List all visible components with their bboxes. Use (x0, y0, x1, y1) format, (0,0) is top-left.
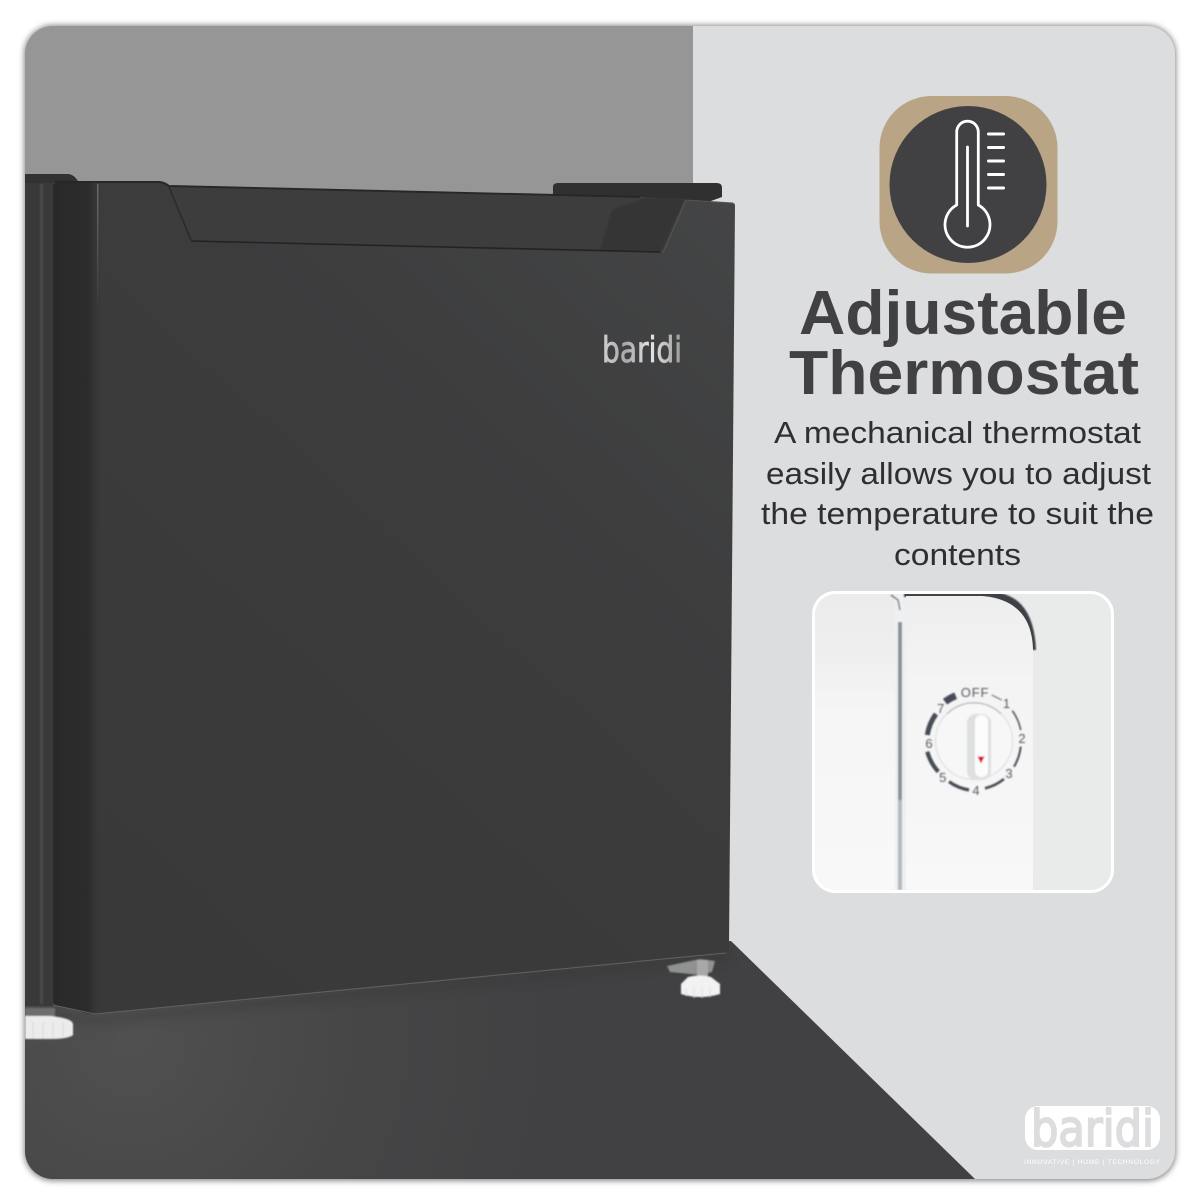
dial numbers: 7 (937, 701, 944, 716)
back wall (25, 26, 693, 194)
heading: Adjustable (799, 279, 1127, 348)
photo frame (814, 592, 1112, 892)
dial knob handle (975, 715, 988, 777)
dial pointer (978, 756, 984, 764)
top hinge (553, 183, 722, 202)
description text (761, 415, 1154, 572)
dial numbers: 6 (925, 736, 933, 751)
control housing shadow (904, 593, 1036, 650)
logo wordmark: baridi (1031, 1100, 1154, 1158)
dial inner ring (934, 714, 1014, 780)
description text: contents (894, 537, 1021, 572)
logo plate (1025, 1106, 1160, 1150)
door seam (890, 594, 902, 890)
description text: the temperature to suit the (761, 496, 1154, 531)
thermometer scale ticks (988, 134, 1004, 188)
logo tagline: INNOVATIVE | HOME | TECHNOLOGY (1024, 1159, 1161, 1166)
handle left edge (169, 187, 191, 240)
dial scale segments (927, 695, 1021, 790)
floor (25, 941, 975, 1179)
thermometer outline (945, 121, 990, 247)
heading (789, 279, 1139, 408)
dial numbers: 4 (972, 783, 980, 798)
door top edge (55, 182, 640, 197)
fridge wall left (815, 675, 895, 890)
heading: Thermostat (789, 339, 1139, 408)
door left strip (53, 183, 94, 1014)
left foot (25, 1008, 73, 1039)
dial numbers: 5 (939, 770, 946, 785)
brand logo (1024, 1100, 1161, 1166)
dial numbers (925, 685, 1026, 798)
right foot (667, 959, 720, 998)
door top-right edge (663, 200, 733, 253)
thermometer mercury line (966, 147, 969, 226)
icon: thermometer badge (880, 96, 1058, 274)
door strip highlight (97, 184, 98, 304)
door (53, 181, 735, 1014)
right wall (693, 26, 1175, 1179)
handle recess (169, 187, 685, 253)
door bottom highlight (53, 953, 726, 1014)
dial numbers: 3 (1005, 766, 1013, 781)
dial (925, 685, 1026, 798)
door shadow on floor (40, 953, 730, 1023)
handle shade (600, 198, 685, 251)
dial numbers: 1 (1003, 696, 1010, 711)
dial numbers: OFF (961, 685, 989, 700)
photo background (1006, 594, 1111, 890)
dial knob shadow (967, 714, 991, 780)
control housing (906, 596, 1033, 893)
handle bottom edge (191, 241, 660, 252)
panel: thermostat photo (813, 592, 1114, 893)
description text: easily allows you to adjust (766, 456, 1151, 491)
dial numbers: 2 (1018, 731, 1026, 746)
fridge body side (25, 174, 79, 1006)
description text: A mechanical thermostat (774, 415, 1141, 450)
fridge (25, 174, 735, 1039)
door logo: baridi (602, 330, 682, 371)
